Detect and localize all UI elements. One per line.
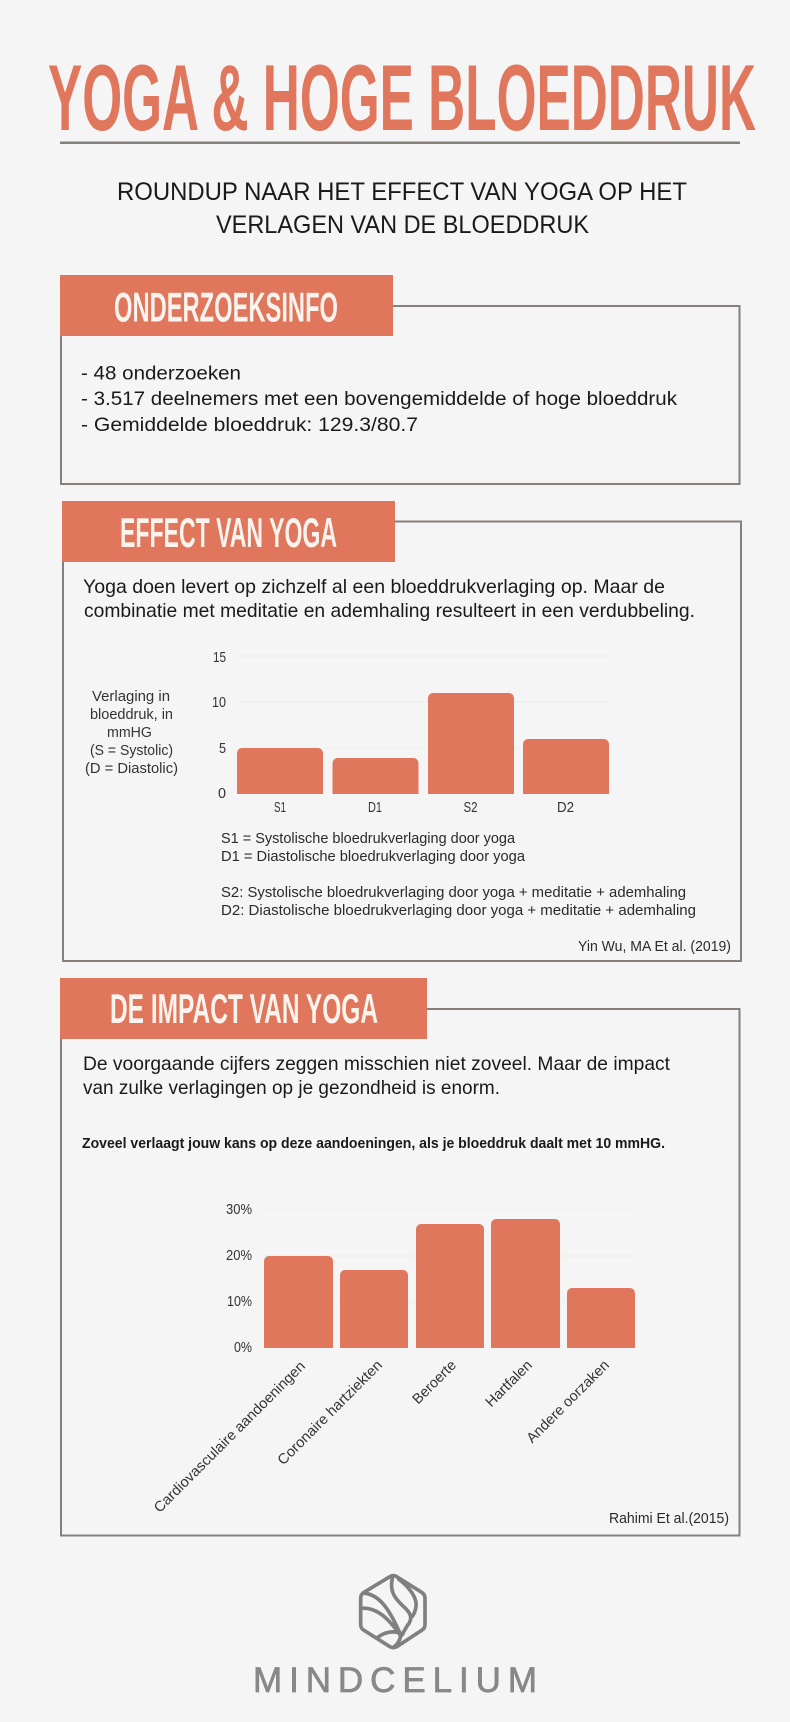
panel: onderzoeksinfo [60, 275, 740, 484]
chart legend: D2: Diastolische bloedrukverlaging door yoga + meditatie + ademhaling [221, 903, 696, 919]
chart legend: S1 = Systolische bloedrukverlaging door yoga [221, 831, 516, 847]
bar chart: risk reduction: 10% [227, 1294, 252, 1310]
intro text: Yoga doen levert op zichzelf al een bloeddrukverlaging op. Maar de [83, 576, 665, 598]
bar chart: blood pressure reduction [212, 650, 609, 816]
bar chart: blood pressure reduction: S2 [464, 800, 478, 816]
heading: onderzoeksinfo [60, 275, 393, 336]
y-axis title: (S = Systolic) [90, 743, 173, 759]
intro text [83, 576, 695, 622]
rotated category labels: Cardiovasculaire aandoeningen [151, 1359, 309, 1516]
citation: Yin Wu, MA Et al. (2019) [578, 939, 731, 955]
bar chart: blood pressure reduction: 5 [219, 741, 226, 757]
intro text: De voorgaande cijfers zeggen misschien niet zoveel. Maar de impact [83, 1053, 671, 1075]
rotated category labels: Coronaire hartziekten [275, 1358, 386, 1469]
logo: mindcelium [253, 1576, 537, 1700]
bar chart: blood pressure reduction: 10 [212, 695, 226, 711]
study facts: - Gemiddelde bloeddruk: 129.3/80.7 [81, 414, 418, 436]
heading: de impact van yoga: DE IMPACT VAN YOGA [110, 985, 378, 1032]
chart legend: S2: Systolische bloedrukverlaging door yoga + meditatie + ademhaling [221, 885, 686, 901]
study facts: - 3.517 deelnemers met een bovengemiddelde of hoge bloeddruk [81, 388, 677, 410]
chart legend [221, 831, 696, 919]
bar chart: blood pressure reduction: D2 [557, 800, 574, 816]
study facts [81, 362, 677, 436]
subtitle [117, 178, 687, 239]
panel: de impact van yoga [60, 978, 740, 1536]
y-axis title: Verlaging in [92, 689, 170, 705]
rotated category labels: Hartfalen [483, 1358, 536, 1411]
chart legend: D1 = Diastolische bloedrukverlaging door yoga [221, 849, 526, 865]
study facts: - 48 onderzoeken [81, 362, 241, 384]
heading: effect van yoga: EFFECT VAN YOGA [120, 509, 337, 556]
heading: de impact van yoga [60, 978, 427, 1039]
rotated category labels: Andere oorzaken [524, 1358, 613, 1447]
bar chart: blood pressure reduction: S1 [274, 800, 286, 816]
icon: leaf in hexagon [361, 1576, 425, 1648]
bar chart: risk reduction [151, 1202, 636, 1516]
bar chart: blood pressure reduction: D1 [368, 800, 382, 816]
y-axis title: bloeddruk, in [90, 707, 173, 723]
rotated category labels [151, 1358, 613, 1516]
intro text [83, 1053, 671, 1099]
bar chart: risk reduction: 30% [226, 1202, 252, 1218]
rotated category labels: Beroerte [410, 1358, 460, 1408]
chart caption: Zoveel verlaagt jouw kans op deze aandoeningen, als je bloeddruk daalt met 10 mmHG. [82, 1135, 665, 1152]
intro text: combinatie met meditatie en ademhaling resulteert in een verdubbeling. [84, 600, 695, 622]
intro text: van zulke verlagingen op je gezondheid is enorm. [83, 1077, 500, 1099]
bar chart: risk reduction: 20% [226, 1248, 252, 1264]
subtitle: VERLAGEN VAN DE BLOEDDRUK [216, 211, 589, 239]
heading: effect van yoga [62, 501, 395, 562]
subtitle: ROUNDUP NAAR HET EFFECT VAN YOGA OP HET [117, 178, 687, 206]
y-axis title [85, 689, 178, 777]
y-axis title: mmHG [107, 725, 152, 741]
bar chart: blood pressure reduction: 15 [213, 650, 226, 666]
panel: effect van yoga [62, 501, 741, 961]
wordmark: MINDCELIUM [253, 1661, 537, 1700]
heading: onderzoeksinfo: ONDERZOEKSINFO [114, 284, 338, 330]
bar chart: risk reduction: 0% [234, 1340, 252, 1356]
bar chart: blood pressure reduction: 0 [218, 786, 226, 802]
citation: Rahimi Et al.(2015) [609, 1511, 729, 1527]
y-axis title: (D = Diastolic) [85, 761, 178, 777]
